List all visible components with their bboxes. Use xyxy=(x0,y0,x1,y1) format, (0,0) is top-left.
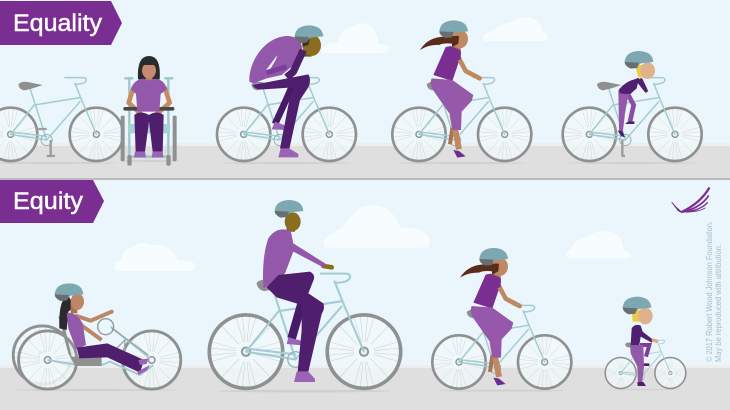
panel: equality sky xyxy=(0,0,730,179)
banner: Equality xyxy=(0,1,122,45)
tall man on properly sized bicycle xyxy=(209,200,401,393)
child on small bicycle xyxy=(605,297,686,390)
woman in wheelchair xyxy=(120,56,180,166)
empty bicycle xyxy=(0,78,123,164)
cloud xyxy=(483,17,548,41)
child stretching on oversized bicycle xyxy=(563,51,702,164)
woman on bicycle xyxy=(392,20,531,164)
ground: equality xyxy=(0,143,730,180)
copyright line 1: © 2017 Robert Wood Johnson Foundation. xyxy=(705,221,714,362)
cloud xyxy=(115,243,195,271)
copyright line 2: May be reproduced with attribution. xyxy=(714,244,723,362)
cloud xyxy=(322,23,389,53)
bottom row figures, left part xyxy=(13,200,401,393)
heading: Equity: Equity xyxy=(13,188,83,215)
cloud xyxy=(324,205,430,248)
banner: Equity xyxy=(0,180,104,223)
heading: Equality: Equality xyxy=(13,10,102,37)
ground: equity xyxy=(0,365,730,410)
rider on hand cycle xyxy=(13,283,181,391)
logo: bird xyxy=(672,188,709,212)
panel: equity sky xyxy=(0,180,730,410)
top row figures, left half xyxy=(0,25,356,166)
tall man squeezed on bicycle xyxy=(217,25,356,164)
cloud xyxy=(566,231,631,258)
top row figures, right half xyxy=(392,20,702,164)
bottom row figures, right part xyxy=(432,188,709,392)
woman on bicycle xyxy=(432,248,571,392)
